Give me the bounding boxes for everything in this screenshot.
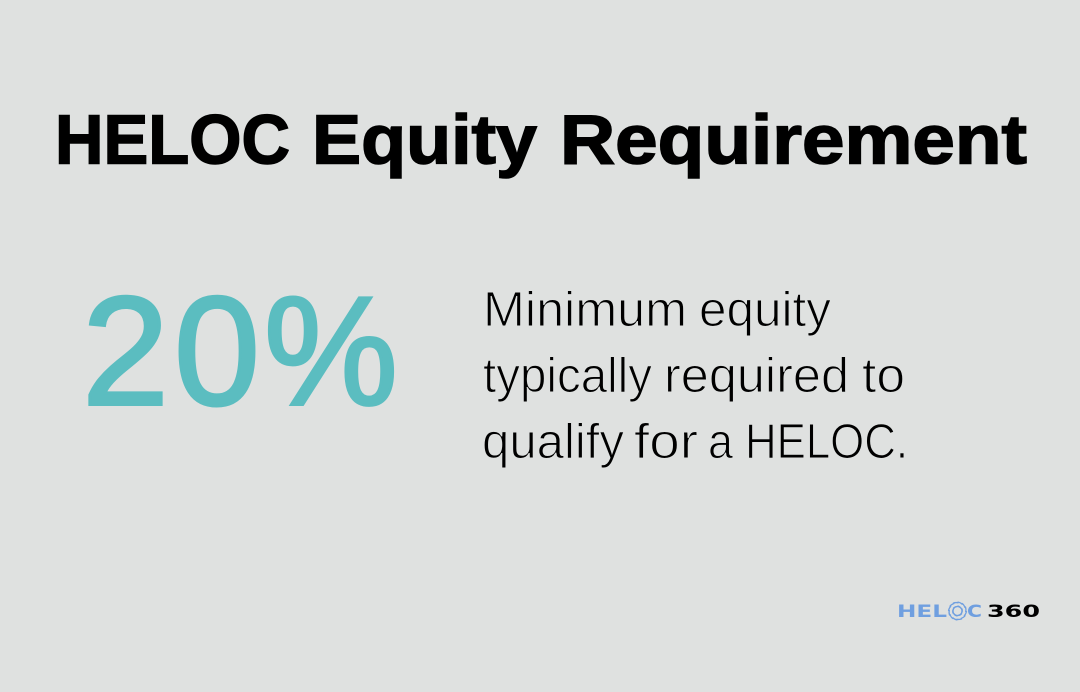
description text: to <box>862 349 905 403</box>
logo letter: C: C <box>967 602 982 622</box>
description text: required <box>664 349 849 403</box>
description text <box>482 283 908 469</box>
title: Requirement <box>560 100 1027 178</box>
big statistic: 20% <box>82 264 398 438</box>
title: HELOC <box>55 100 290 178</box>
description text: a <box>708 415 734 469</box>
description text: HELOC. <box>745 415 908 469</box>
big statistic: 20%: % <box>264 264 398 438</box>
logo icon: swirl O <box>947 601 968 621</box>
big statistic: 20%: 0 <box>174 264 260 438</box>
big statistic: 20%: 2 <box>82 264 169 438</box>
logo letters: HEL: HEL <box>897 602 947 622</box>
logo digits: 360: 360 <box>987 602 1040 622</box>
title <box>55 100 1027 178</box>
description text: equity <box>699 283 831 337</box>
title: Equity <box>312 100 537 178</box>
description text: for <box>634 415 698 469</box>
description text: Minimum <box>483 283 687 337</box>
description text: qualify <box>482 415 625 469</box>
description text: typically <box>483 349 652 403</box>
logo: HELOC360 <box>897 601 1040 622</box>
